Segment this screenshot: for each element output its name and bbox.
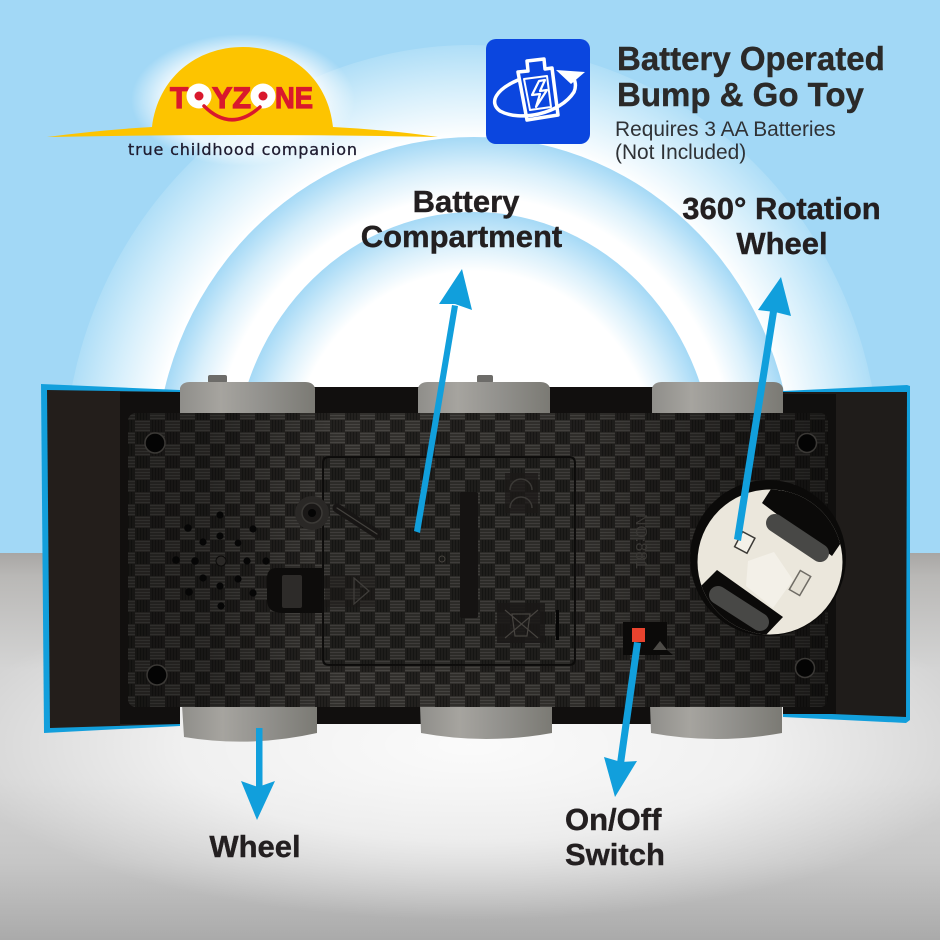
logo: toyzone: [47, 34, 438, 166]
battery compartment door: [323, 457, 575, 665]
arrow: battery compartment: [414, 269, 472, 533]
label: battery compartment: Battery: [413, 184, 520, 219]
paperclip mark: [337, 508, 377, 534]
label: 360 rotation wheel: 360° Rotation: [682, 191, 881, 226]
subtitle: battery requirement: Requires 3 AA Batteries: [615, 118, 836, 141]
arrow: 360 rotation wheel: [734, 277, 791, 541]
title: battery operated bump and go toy: [617, 40, 885, 113]
label: on/off switch: [565, 802, 665, 872]
arrow: on/off switch: [604, 642, 641, 797]
door screw: [295, 496, 329, 530]
model number mark: NO:881: [632, 514, 649, 569]
logo tagline: true childhood companion: [128, 140, 357, 159]
speaker holes: [172, 511, 270, 610]
logo eyes: [186, 84, 276, 108]
label: 360 rotation wheel: Wheel: [736, 226, 828, 261]
360 degree rotation wheel: [690, 480, 846, 637]
textured base plate: [128, 413, 828, 707]
on/off switch: [623, 622, 673, 655]
logo wordmark: NE: [275, 82, 313, 115]
wheel slot right: [789, 570, 811, 596]
label: 360 rotation wheel: [682, 191, 881, 261]
logo sun: [47, 47, 438, 137]
wheel slot left: [735, 532, 755, 553]
door latch slot: [267, 568, 322, 613]
bottom wheels: [182, 705, 782, 742]
right black bumper: [783, 392, 907, 717]
crossed-out bin icon: [497, 603, 545, 643]
toy underside: [41, 375, 910, 742]
icon: battery with rotation arrow: [486, 39, 590, 144]
plate screw holes: [145, 433, 816, 685]
label: battery compartment: Compartment: [361, 219, 562, 254]
battery polarity icon: [505, 473, 538, 513]
dark chassis between wheels: [312, 387, 656, 724]
subtitle: battery requirement: (Not Included): [615, 141, 746, 164]
label: battery compartment: [361, 184, 562, 254]
label: on/off switch: Switch: [565, 837, 665, 872]
top wheel pegs: [208, 375, 493, 383]
title: battery operated bump and go toy: Bump & Go Toy: [617, 76, 865, 113]
left black bumper: [47, 390, 180, 728]
blue toy shell right: [783, 385, 910, 723]
background: grey floor: [0, 553, 940, 940]
title: battery operated bump and go toy: Battery Operated: [617, 40, 885, 77]
logo wordmark: [170, 82, 313, 115]
arrow marker on door: [325, 575, 375, 607]
blue toy shell: [41, 384, 180, 733]
logo wordmark: YZ: [212, 82, 251, 115]
arrow: wheel: [241, 728, 275, 820]
logo smile: [204, 106, 260, 120]
label: on/off switch: On/Off: [565, 802, 662, 837]
dark latch bar: [460, 492, 478, 618]
label: wheel: Wheel: [209, 829, 301, 864]
logo wordmark: T: [170, 82, 188, 115]
top wheels: [180, 382, 783, 414]
subtitle: battery requirement: [615, 118, 836, 164]
